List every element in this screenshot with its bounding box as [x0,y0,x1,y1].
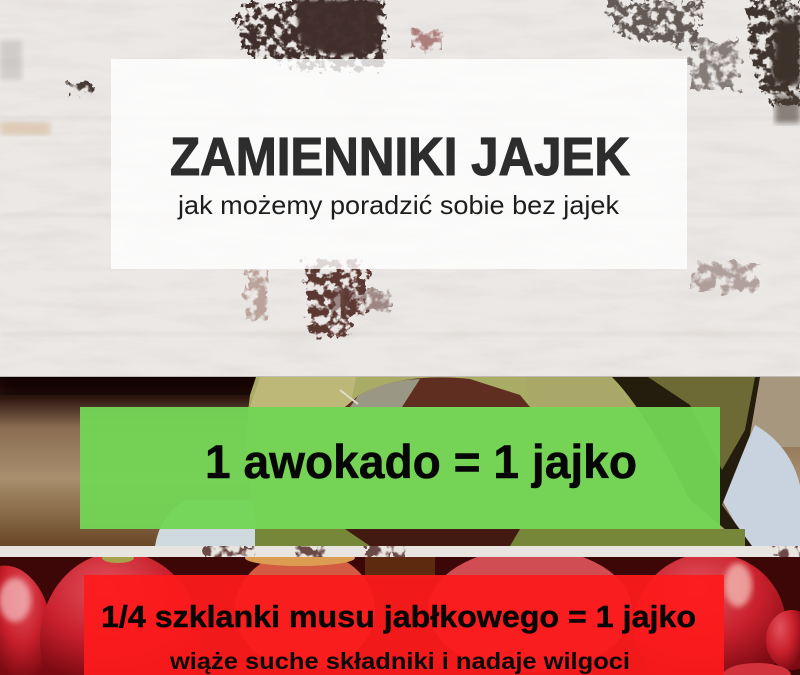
divider strip: brick between photos [0,376,800,557]
callout heading: 1/4 szklanki musu jabłkowego = 1 jajko [101,599,696,634]
panel: apple callout [84,575,724,675]
callout text: 1 awokado = 1 jajko [205,435,637,488]
heading: ZAMIENNIKI JAJEK [170,127,630,187]
brick mortar lines [0,118,800,334]
photo: avocado [0,377,800,546]
callout description: wiąże suche składniki i nadaje wilgoci [169,648,630,674]
avocado seed [345,377,530,407]
photo: apples [0,548,800,675]
panel: title box [111,59,687,269]
avocado skin [612,377,760,546]
plate [722,425,800,546]
subheading: jak możemy poradzić sobie bez jajek [177,190,620,220]
panel: avocado callout [80,407,720,529]
background: white painted brick wall [0,0,800,377]
dark peeled paint patches [296,0,378,56]
avocado flesh [248,377,724,529]
